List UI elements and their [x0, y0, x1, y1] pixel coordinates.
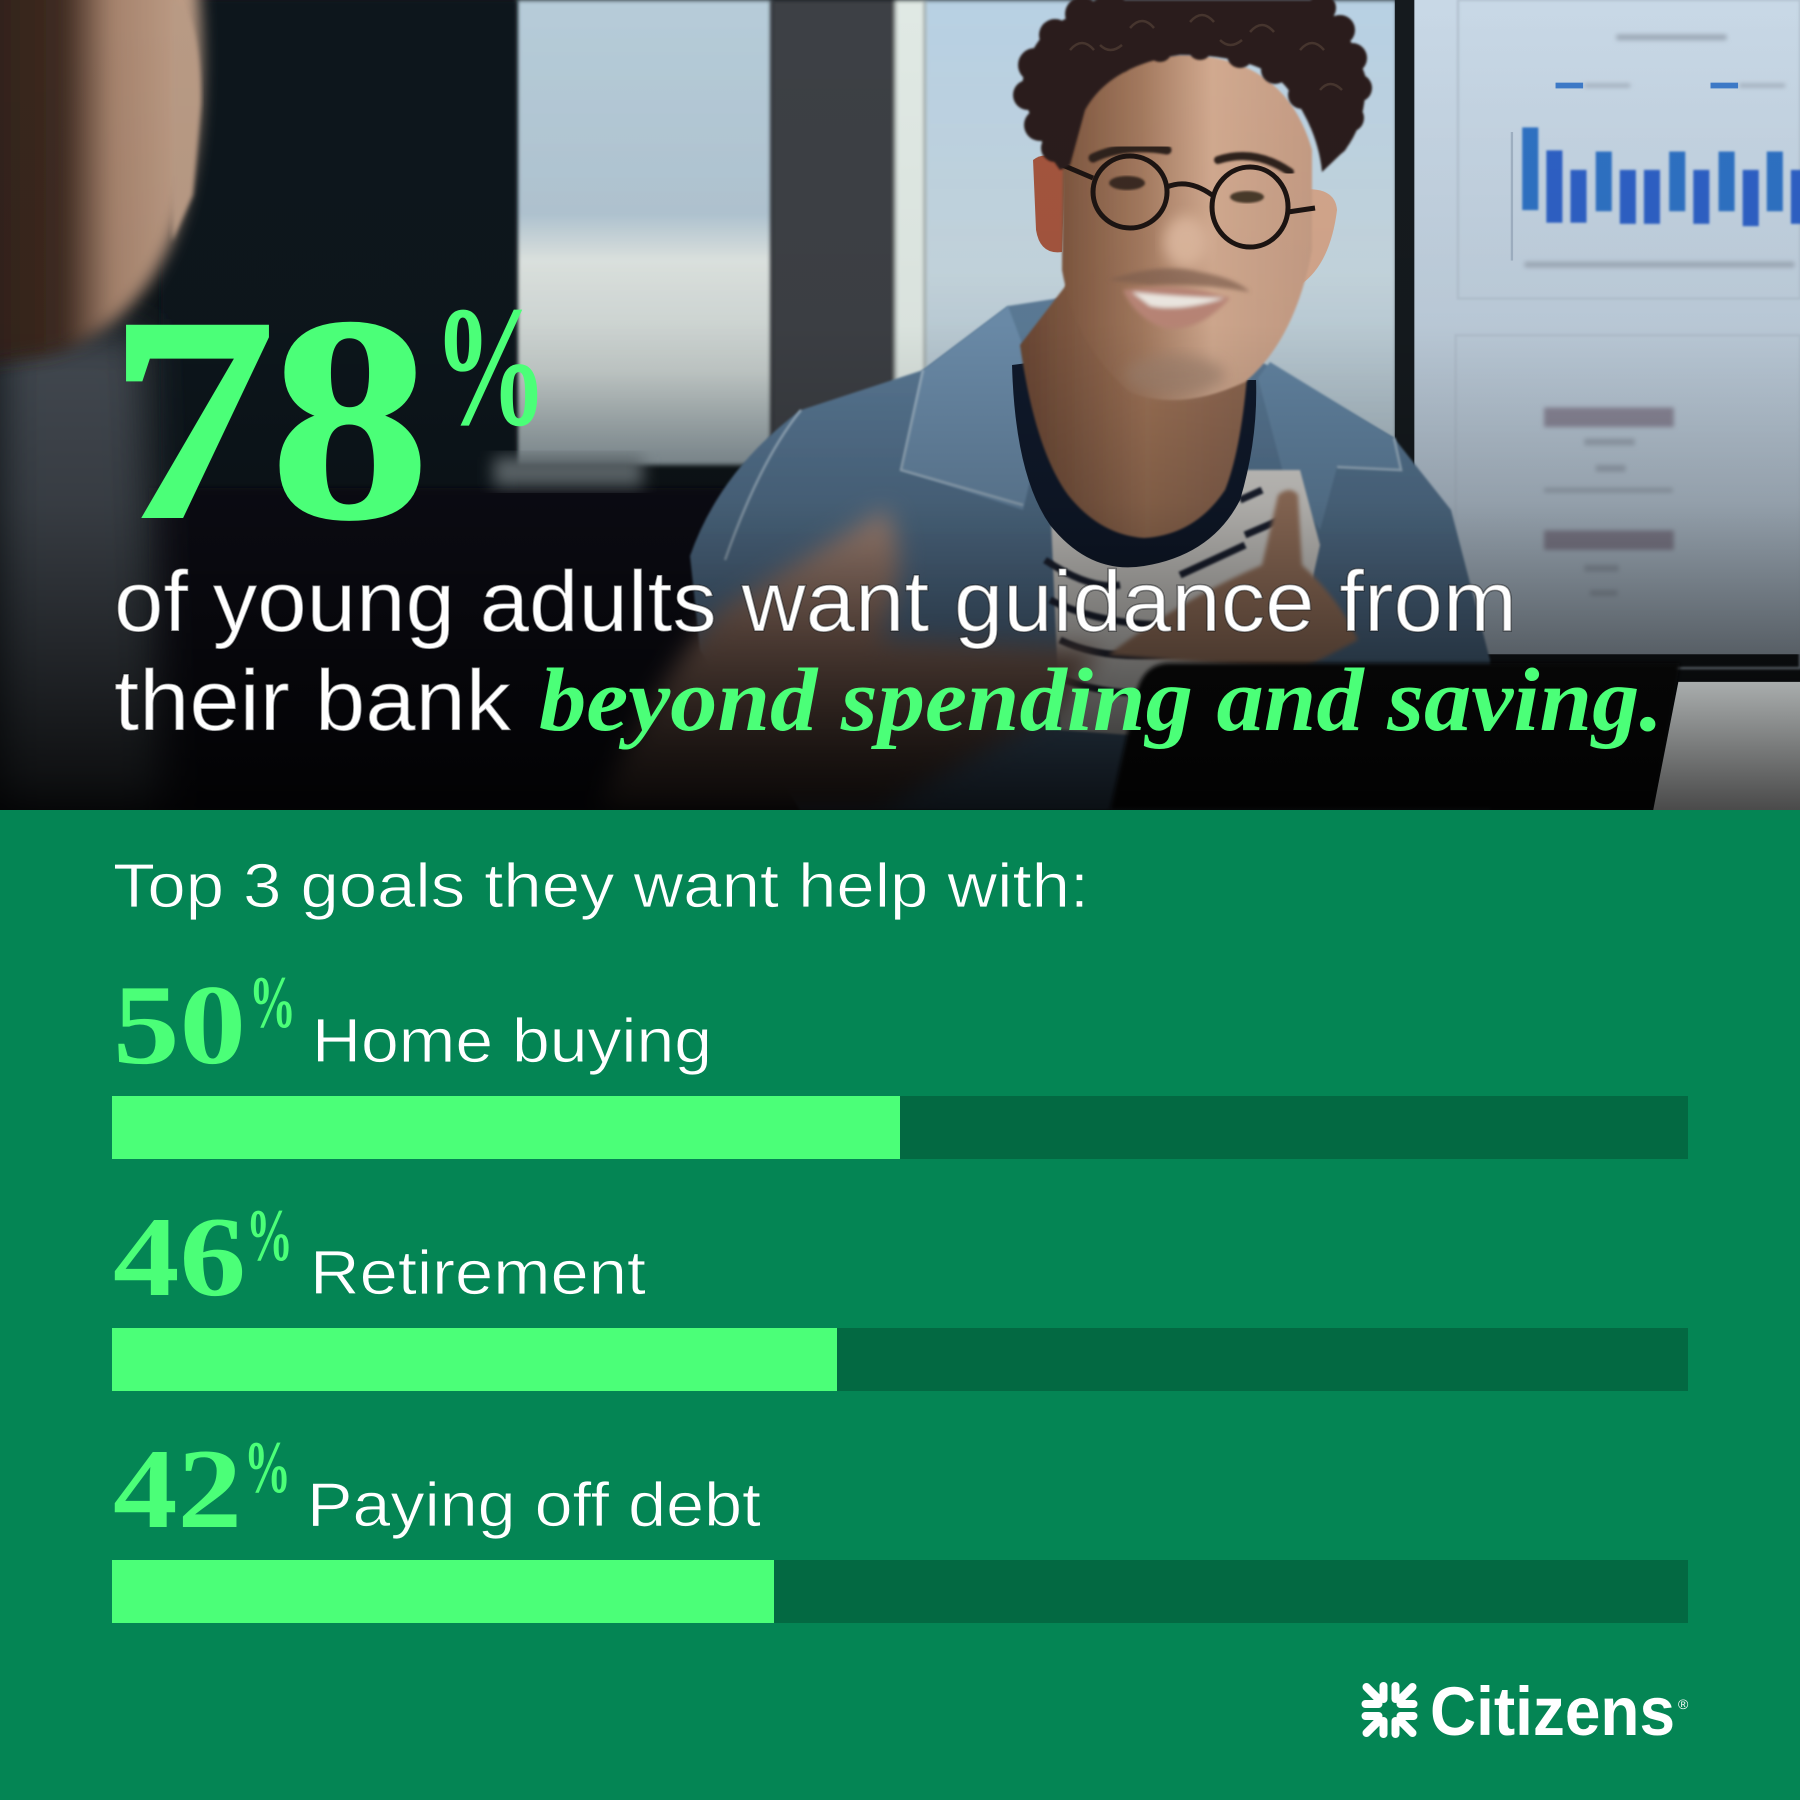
- logo: Citizens: ®: [1678, 1696, 1689, 1712]
- dark wall: [512, 0, 520, 462]
- ear right: [1303, 189, 1337, 282]
- window centre: [922, 0, 1395, 440]
- subheading: Top 3 goals they want help with:: [113, 852, 1089, 921]
- goal row: paying off debt: %: [244, 1427, 291, 1509]
- panel: photo background: [0, 0, 1800, 810]
- laptop edge: [1653, 682, 1800, 810]
- logo: Citizens: Citizens: [1430, 1673, 1675, 1750]
- headline stat: 78%: %: [433, 272, 548, 462]
- eyes: [1109, 176, 1145, 190]
- person left foreground: [0, 0, 201, 810]
- glasses: [1060, 156, 1315, 247]
- monitor: [1395, 0, 1800, 684]
- goal row: home buying: Home buying: [312, 1007, 712, 1076]
- shirt: [1051, 470, 1320, 740]
- goal row: retirement: 46: [113, 1193, 246, 1320]
- goal row: retirement: Retirement: [310, 1239, 646, 1308]
- icon: Citizens arrows mark: [1366, 1686, 1414, 1734]
- headline stat: 78%: 7: [108, 258, 276, 581]
- headline text: [114, 554, 1663, 750]
- goal row: home buying: [112, 961, 1688, 1159]
- shirt collar: [1012, 360, 1256, 567]
- goal row: home buying: 50: [113, 961, 246, 1088]
- panel: green statistics background: [0, 810, 1800, 1800]
- jacket: [690, 298, 1490, 810]
- hands blurred: [600, 510, 1100, 810]
- goal row: retirement: [112, 1193, 1688, 1391]
- goal row: paying off debt: Paying off debt: [307, 1471, 761, 1540]
- goal row: home buying: %: [249, 962, 296, 1044]
- headline stat: 78%: 8: [270, 258, 430, 581]
- brows: [1093, 148, 1290, 172]
- darkening overlay: [0, 331, 1800, 810]
- goal row: paying off debt: [112, 1425, 1688, 1623]
- headline stat: 78%: [108, 258, 548, 581]
- goal row: retirement: %: [246, 1195, 293, 1277]
- ear left: [1033, 155, 1065, 252]
- mouth: [1108, 268, 1250, 328]
- hair: [1013, 0, 1372, 172]
- column: [771, 0, 925, 459]
- face: [1062, 55, 1312, 400]
- desk: [194, 488, 518, 496]
- goal row: paying off debt: 42: [113, 1425, 242, 1552]
- headline text: beyond spending and saving.: [539, 651, 1663, 750]
- laptop: [1110, 663, 1680, 810]
- neck: [1020, 280, 1250, 538]
- window left: [517, 0, 771, 465]
- headline text: their bank: [114, 653, 512, 749]
- headline text: of young adults want guidance from: [114, 554, 1517, 650]
- man, drawn in 1800-space coordinates: [600, 0, 1680, 810]
